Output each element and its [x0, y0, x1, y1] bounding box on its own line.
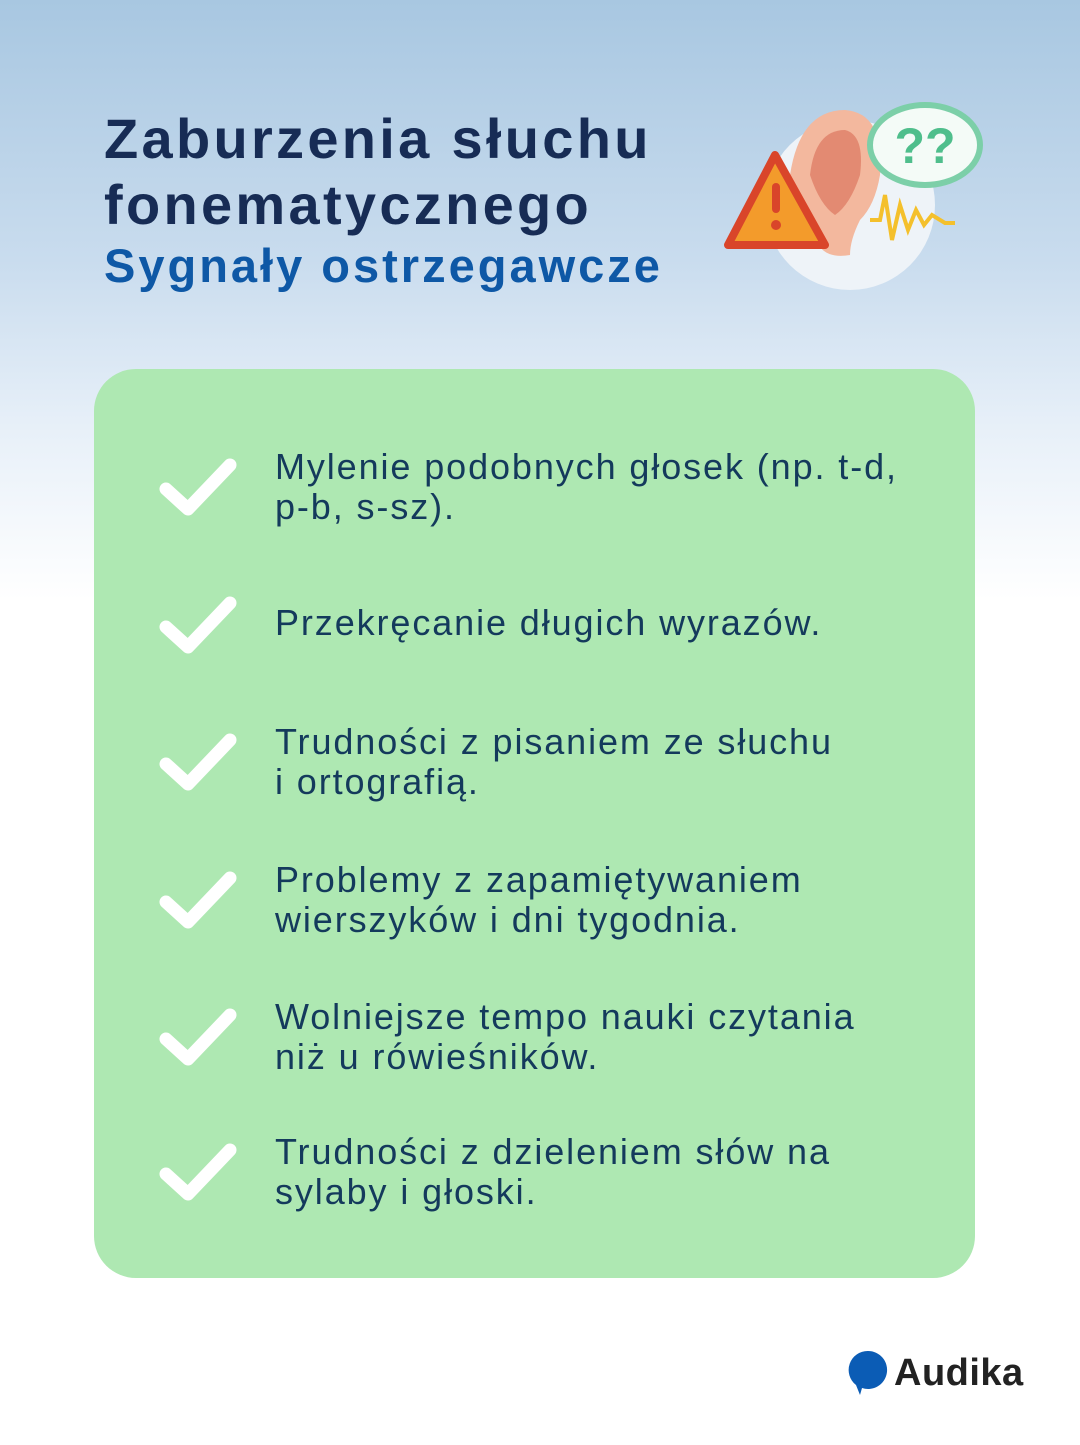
item 1: Mylenie podobnych głosek (np. t-d,	[275, 446, 898, 487]
title	[104, 107, 663, 292]
logo: Audika: Audika	[894, 1352, 1024, 1394]
item 5	[160, 996, 856, 1077]
item 3	[160, 721, 833, 802]
item 1	[160, 446, 898, 527]
item 1: p-b, s-sz).	[275, 486, 456, 527]
panel: warning signs	[94, 369, 975, 1278]
item 3: i ortografią.	[275, 761, 480, 802]
item 5: niż u rówieśników.	[275, 1036, 599, 1077]
item 4	[160, 859, 803, 940]
title: Sygnały ostrzegawcze	[104, 239, 663, 292]
item 2	[160, 596, 822, 654]
item 2: Przekręcanie długich wyrazów.	[275, 602, 822, 643]
title: Zaburzenia słuchu	[104, 107, 652, 170]
item 3: Trudności z pisaniem ze słuchu	[275, 721, 833, 762]
icon: ear with warning and question bubble: ??	[894, 118, 956, 174]
item 4: wierszyków i dni tygodnia.	[275, 899, 741, 940]
item 6	[160, 1131, 831, 1212]
item 6: Trudności z dzieleniem słów na	[275, 1131, 831, 1172]
item 4: Problemy z zapamiętywaniem	[275, 859, 803, 900]
item 5: Wolniejsze tempo nauki czytania	[275, 996, 856, 1037]
icon: ear with warning and question bubble	[724, 102, 983, 290]
item 6: sylaby i głoski.	[275, 1171, 537, 1212]
title: fonematycznego	[104, 173, 592, 236]
